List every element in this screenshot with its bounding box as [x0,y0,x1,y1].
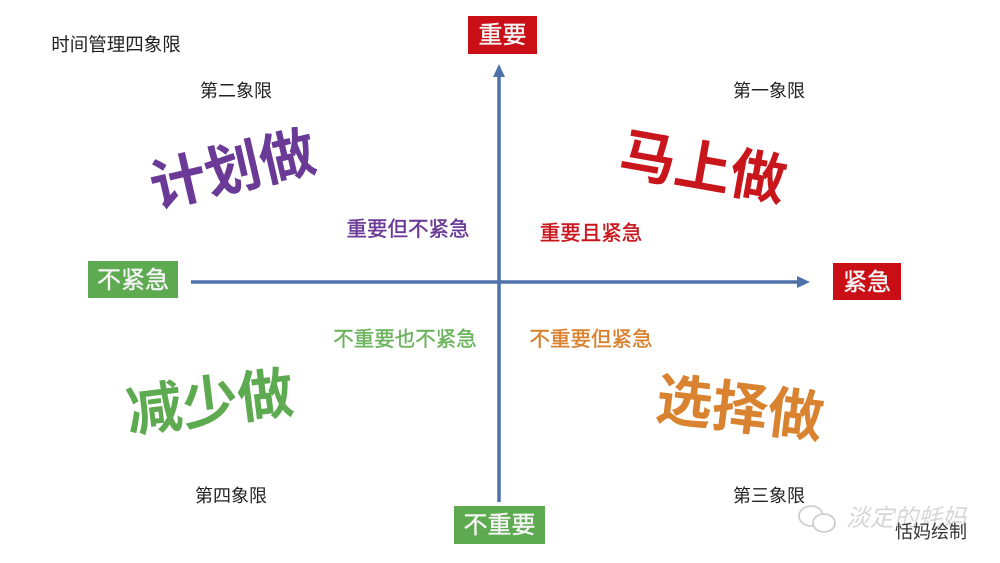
icon: watermark chat bubbles [798,505,836,533]
quadrant 3 label: 第三象限 [733,486,805,506]
description: not important but urgent: 不重要但紧急 [530,328,652,351]
action: reduce: 减少做 [123,361,297,444]
vertical axis arrow [493,64,505,502]
credit: 恬妈绘制 [895,522,967,542]
label: urgent: 紧急 [843,268,891,296]
description: neither: 不重要也不紧急 [333,328,477,351]
action: plan: 计划做 [144,120,322,219]
quadrant 4 label: 第四象限 [195,486,267,506]
description: important and urgent: 重要且紧急 [540,222,642,245]
label: not important: 不重要 [464,512,536,539]
label: not urgent [88,261,178,298]
watermark text: 淡定的蚝妈 [846,505,966,532]
description: important not urgent: 重要但不紧急 [346,218,470,241]
label: important: 重要 [478,22,526,49]
title: 时间管理四象限 [51,34,181,55]
label: urgent [833,263,901,300]
action: choose: 选择做 [653,367,827,450]
quadrant 1 label: 第一象限 [733,81,805,101]
label: important [468,16,537,54]
label: not urgent: 不紧急 [97,266,169,294]
action: do now: 马上做 [615,122,791,213]
horizontal axis arrow [191,276,810,288]
quadrant 2 label: 第二象限 [200,81,272,101]
label: not important [454,506,545,544]
